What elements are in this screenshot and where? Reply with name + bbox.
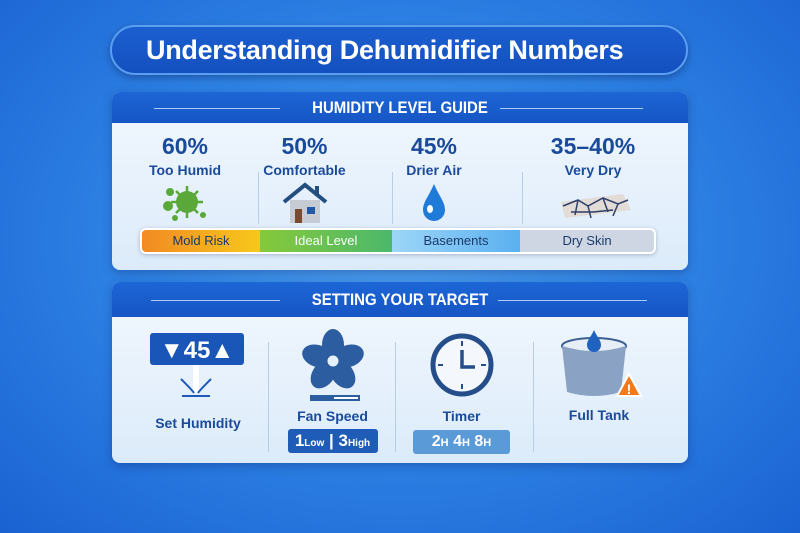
level 60% [149,133,221,221]
icon: humidity display: ▼45▲ [160,337,234,364]
heading: setting your target [112,282,688,317]
level 35-40%: Very Dry [565,162,621,178]
title [110,25,688,75]
full tank: Full Tank [569,407,629,423]
full tank [561,330,642,423]
title: Understanding Dehumidifier Numbers [146,35,623,65]
heading: setting your target: SETTING YOUR TARGET [312,290,488,309]
icon: house [282,182,328,223]
timer settings: 2H 4H 8H [432,433,491,450]
icon: mold [163,186,206,221]
fan speed [288,329,378,453]
scale bar: Dry Skin [562,233,612,248]
icon: bucket with warning [561,330,642,397]
icon: cracked ground [561,194,631,218]
level 50%: 50% [281,133,328,159]
panel: setting your target [112,282,688,463]
level 50% [263,133,346,223]
level 60%: Too Humid [149,162,221,178]
level 45% [406,133,462,221]
timer: Timer [443,408,480,424]
level 60%: 60% [162,133,208,159]
scale bar: Mold Risk [172,233,230,248]
panel: humidity level guide [112,92,688,270]
timer settings [413,430,510,454]
timer [413,334,510,454]
icon: fan [302,329,364,401]
heading: humidity level guide [112,92,688,123]
icon: humidity display [150,333,244,397]
level 35-40% [551,133,635,218]
icon: bucket with warning: ! [627,381,631,397]
fan speed settings [288,429,378,453]
set humidity [150,333,244,431]
icon: water drop [423,184,445,221]
level 45%: 45% [411,133,457,159]
scale bar: Basements [423,233,489,248]
level 45%: Drier Air [406,162,462,178]
set humidity: Set Humidity [155,415,241,431]
heading: humidity level guide: HUMIDITY LEVEL GUIDE [312,98,488,117]
level 50%: Comfortable [263,162,346,178]
fan speed settings: 1Low | 3High [295,431,370,450]
scale bar: Ideal Level [295,233,357,248]
scale bar [140,228,656,254]
icon: clock [430,334,494,396]
level 35-40%: 35–40% [551,133,635,159]
fan speed: Fan Speed [297,408,368,424]
